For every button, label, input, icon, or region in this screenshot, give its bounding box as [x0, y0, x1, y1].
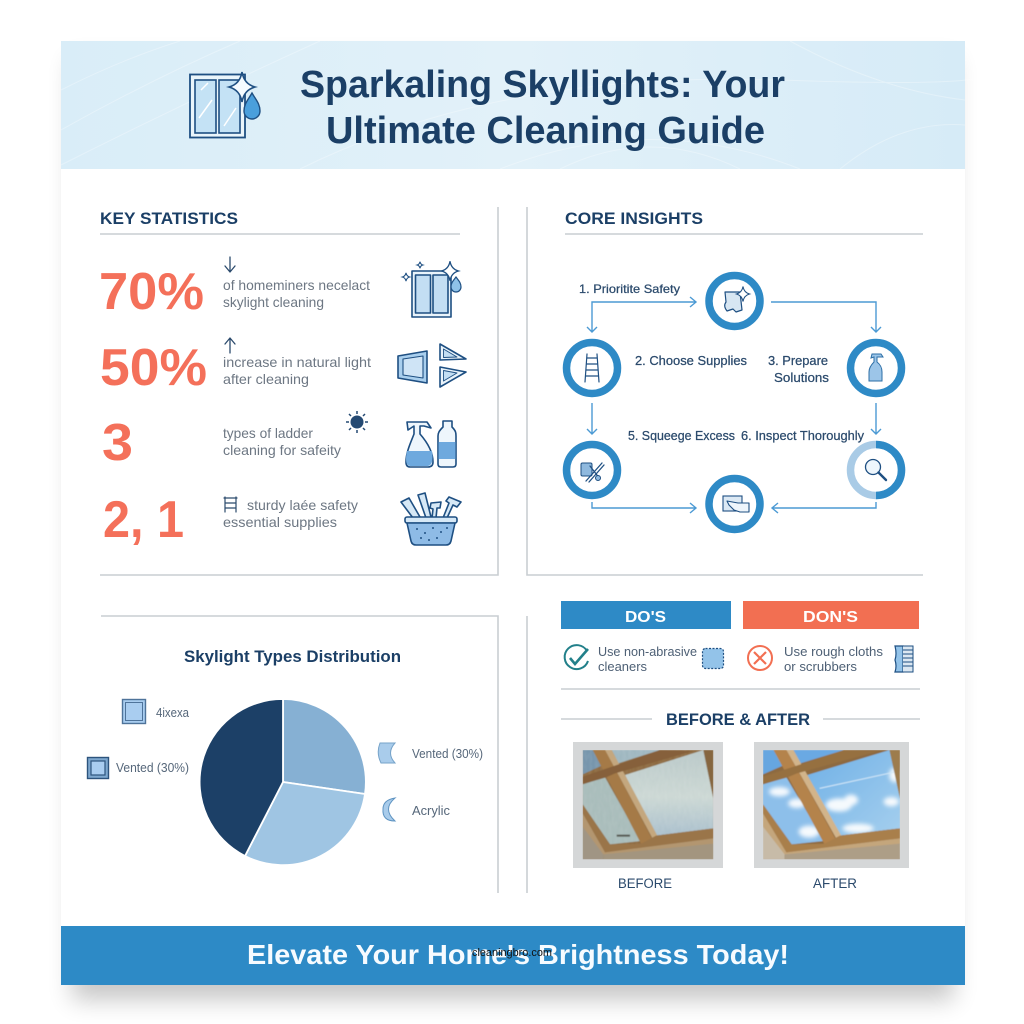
heading: before and after: BEFORE & AFTER	[666, 710, 810, 729]
step circle: magnifier	[850, 444, 902, 496]
icon: window	[402, 261, 461, 317]
chart title: Skylight Types Distribution	[184, 647, 401, 666]
flow arrows	[587, 297, 881, 513]
don'ts banner: DON'S	[803, 609, 858, 626]
legend: fixed	[122, 700, 189, 724]
legend: acrylic: Acrylic	[412, 804, 450, 818]
panel: key statistics	[99, 207, 498, 575]
stat: 2, 1: essential supplies	[223, 514, 337, 530]
do's banner	[561, 601, 731, 629]
legend: acrylic	[383, 798, 450, 821]
don't item: or scrubbers	[784, 659, 858, 674]
legend: fixed: 4ixexa	[156, 706, 189, 720]
pie chart	[200, 699, 366, 865]
step circle: gloved hand wiping	[709, 478, 760, 530]
card shadow	[72, 60, 954, 1000]
stat: 70%: 70%	[99, 263, 204, 321]
stat: 3	[102, 414, 341, 472]
don't item	[748, 644, 913, 674]
do item: cleaners	[598, 659, 647, 674]
don'ts banner	[743, 601, 919, 629]
stat: 2, 1	[103, 491, 358, 549]
call to action: Elevate Your Home's Brightness Today!	[247, 939, 789, 970]
stat: 70%: skylight cleaning	[223, 294, 324, 310]
stat: 2, 1: sturdy laée safety	[247, 497, 358, 513]
step 3 label	[768, 353, 830, 385]
stat: 50%: after cleaning	[223, 371, 309, 387]
icon: skylight shapes	[398, 344, 466, 387]
stat: 70%: of homeminers necelact	[223, 277, 370, 293]
do item: Use non-abrasive	[598, 644, 697, 659]
stat: 3: 3	[102, 414, 133, 472]
do item	[565, 644, 724, 674]
steps 5 and 6 labels	[628, 428, 864, 443]
step circle: spray bottle	[850, 342, 902, 394]
step 2 label: 2. Choose Supplies	[635, 353, 747, 368]
legend: vented right: Vented (30%)	[412, 747, 483, 761]
stat: 3: types of ladder	[223, 425, 313, 441]
heading: key statistics: KEY STATISTICS	[100, 209, 238, 228]
panel: do's, don'ts, before and after	[527, 601, 920, 893]
title	[300, 64, 785, 152]
step 1 label: 1. Prioritite Safety	[579, 282, 680, 296]
watermark: cleaningbro.com	[472, 947, 552, 959]
steps 5 and 6 labels: 6. Inspect Thoroughly	[741, 428, 864, 443]
legend: vented left: Vented (30%)	[116, 761, 189, 775]
legend: vented right	[378, 743, 483, 763]
stat: 50%: increase in natural light	[223, 354, 371, 370]
title: Ultimate Cleaning Guide	[326, 110, 765, 152]
step circle: ladder	[566, 342, 618, 394]
stat: 50%	[100, 338, 371, 397]
header banner	[61, 41, 989, 169]
step 3 label: Solutions	[774, 370, 830, 385]
step circle: cloth and sparkle	[709, 276, 760, 326]
panel: core insights	[527, 207, 923, 575]
photo: before	[573, 742, 723, 868]
stat: 2, 1: 2, 1	[103, 491, 184, 549]
heading: core insights: CORE INSIGHTS	[565, 209, 703, 228]
stat: 70%	[99, 257, 370, 321]
do's banner: DO'S	[625, 609, 666, 626]
legend: vented left	[88, 758, 189, 778]
photo: after	[754, 742, 909, 868]
step 3 label: 3. Prepare	[768, 353, 828, 368]
icon: basket of supplies	[401, 493, 461, 545]
stat: 3: cleaning for safeity	[223, 442, 341, 458]
icon: sun	[346, 411, 368, 433]
footer banner	[61, 926, 965, 985]
icon: window with sparkle and drop	[190, 72, 260, 138]
label: after: AFTER	[813, 876, 857, 891]
label: before: BEFORE	[618, 876, 672, 891]
stat: 50%: 50%	[100, 339, 207, 397]
icon: spray and bottle	[406, 421, 456, 467]
steps 5 and 6 labels: 5. Squeege Excess	[628, 428, 735, 443]
don't item: Use rough cloths	[784, 644, 883, 659]
panel: skylight types pie chart	[88, 616, 498, 893]
title: Sparkaling Skyllights: Your	[300, 64, 785, 106]
step circle: squeegee	[566, 444, 618, 496]
